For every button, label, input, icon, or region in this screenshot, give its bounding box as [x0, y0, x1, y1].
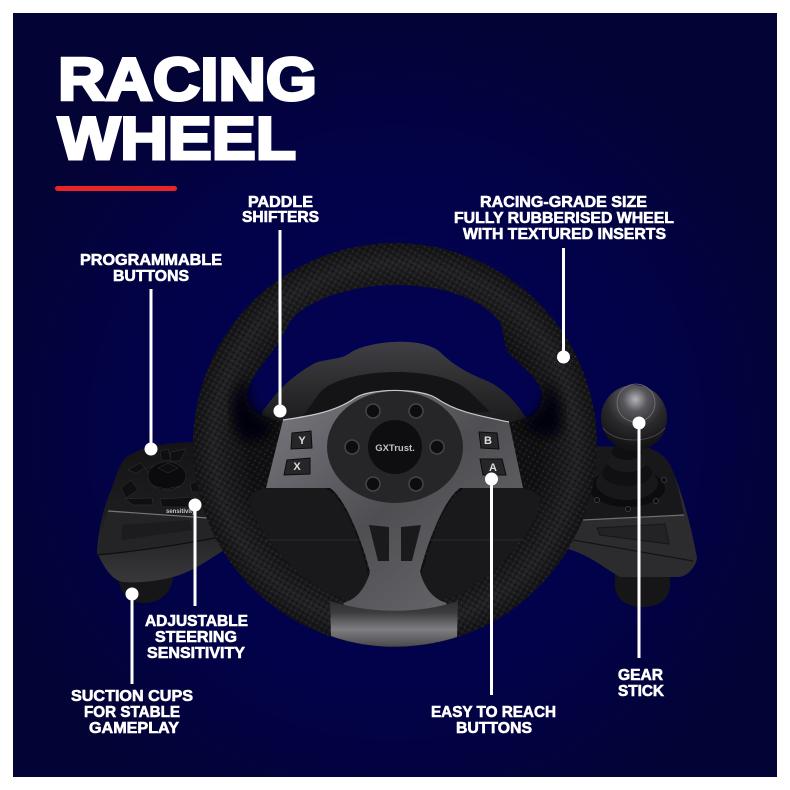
base body [560, 446, 697, 577]
face buttons: A [489, 462, 497, 474]
callout: rubberised wheel: FULLY RUBBERISED WHEEL [454, 210, 674, 227]
callout: easy reach buttons [431, 472, 556, 737]
face buttons: Y [298, 435, 306, 447]
callout: gear stick: STICK [618, 683, 665, 700]
hood recess [300, 372, 490, 420]
callout: steering sensitivity: ADJUSTABLE [145, 613, 248, 630]
lower opening left [250, 488, 368, 600]
title [58, 46, 317, 172]
steering wheel [193, 243, 597, 647]
title: WHEEL [58, 105, 296, 172]
callout: paddle shifters: PADDLE [248, 194, 313, 211]
callout: suction cups: SUCTION CUPS [71, 688, 193, 705]
callout: paddle shifters [242, 194, 319, 418]
spoke slots [369, 525, 421, 561]
suction cup right [615, 565, 670, 607]
right gear stick unit [560, 384, 697, 607]
face buttons: X [293, 461, 301, 473]
callout: easy reach buttons: EASY TO REACH [431, 704, 556, 721]
pad buttons: sensitivity [166, 509, 196, 515]
callout: easy reach buttons: BUTTONS [456, 720, 532, 737]
callout: steering sensitivity: SENSITIVITY [147, 645, 246, 662]
rim ring [193, 243, 597, 647]
rim recess shadows [232, 375, 275, 441]
pad body [97, 442, 240, 582]
face buttons [284, 431, 506, 475]
hub [327, 391, 463, 503]
left control pad [97, 442, 240, 603]
lower opening right [422, 488, 540, 600]
callout: programmable buttons: BUTTONS [113, 268, 189, 285]
red accent bar [55, 186, 177, 191]
callout: gear stick: GEAR [618, 667, 663, 684]
pad buttons [121, 449, 203, 515]
face buttons: B [484, 435, 492, 447]
callout: suction cups: GAMEPLAY [89, 720, 180, 737]
callout: paddle shifters: SHIFTERS [242, 209, 319, 226]
callout: gear stick [618, 416, 665, 700]
metal spokes [266, 390, 523, 612]
title: RACING [58, 46, 317, 113]
callout: programmable buttons [80, 252, 222, 456]
callout: programmable buttons: PROGRAMMABLE [80, 252, 222, 269]
callout: steering sensitivity: STEERING [155, 629, 237, 646]
gear knob [601, 384, 667, 451]
callout: rubberised wheel [454, 194, 674, 364]
suction cup left [117, 565, 173, 603]
callout: suction cups [71, 588, 193, 737]
chrome bottom band [330, 601, 458, 647]
callout: rubberised wheel: RACING-GRADE SIZE [480, 194, 647, 211]
callout: suction cups: FOR STABLE [84, 704, 180, 721]
hub centre logo: GXTrust. [375, 443, 415, 454]
gear boot [589, 444, 666, 512]
callout: steering sensitivity [145, 498, 248, 662]
callout: rubberised wheel: WITH TEXTURED INSERTS [463, 226, 666, 243]
column hood behind wheel [262, 342, 526, 430]
